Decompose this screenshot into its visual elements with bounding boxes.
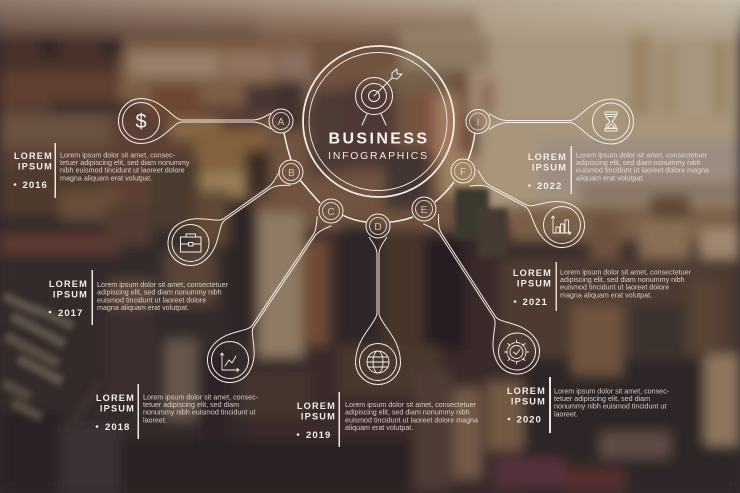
text block 2017: 2017 bbox=[58, 308, 83, 319]
text block 2018: LOREM bbox=[96, 393, 135, 403]
text block 2021: 2021 bbox=[522, 297, 548, 308]
text block 2022: IPSUM bbox=[532, 162, 567, 172]
heading: business: BUSINESS bbox=[328, 130, 430, 148]
connector C: line chart bbox=[199, 199, 343, 391]
text block 2017: LOREM bbox=[49, 279, 88, 289]
node letter C: C bbox=[327, 207, 335, 218]
icon: dollar sign: $ bbox=[135, 111, 147, 133]
text block 2016: tetuer adipiscing elit, sed diam nonummy bbox=[60, 159, 190, 167]
text block 2022: aliquam erat volutpat. bbox=[576, 174, 644, 182]
text block 2016: IPSUM bbox=[18, 162, 53, 172]
icon: target with arrow bbox=[356, 69, 402, 125]
connector F: bar chart bbox=[451, 158, 592, 255]
icon: hourglass bbox=[605, 112, 617, 131]
node letter A: A bbox=[278, 117, 285, 128]
text block 2017: magna aliquam erat volutpat. bbox=[97, 304, 189, 312]
text block 2021: magna aliquam erat volutpat. bbox=[560, 291, 652, 299]
text block 2022: LOREM bbox=[528, 152, 567, 162]
text block 2019: 2019 bbox=[306, 430, 331, 441]
icon: line chart bbox=[220, 353, 239, 372]
connector B: briefcase bbox=[159, 159, 303, 274]
text block 2016 bbox=[14, 143, 190, 198]
text block 2017: adipiscing elit, sed diam nonummy nibh bbox=[97, 289, 222, 297]
text block 2019: adipiscing elit, sed diam nonummy nibh bbox=[345, 409, 470, 417]
text block 2020: laoreet. bbox=[554, 410, 578, 418]
node letter F: F bbox=[460, 167, 466, 178]
text block 2020: LOREM bbox=[507, 386, 546, 396]
text block 2017 bbox=[49, 270, 229, 325]
text block 2020: 2020 bbox=[516, 414, 542, 426]
text block 2018: Lorem ipsum dolor sit amet, consec- bbox=[143, 394, 259, 402]
text block 2019: IPSUM bbox=[301, 412, 336, 422]
text block 2022: euismod tincidunt ut laoreet dolore magna bbox=[576, 167, 709, 175]
icon: briefcase bbox=[180, 234, 201, 252]
text block 2019: LOREM bbox=[297, 401, 336, 411]
connector I: hourglass bbox=[466, 99, 634, 144]
text block 2017: IPSUM bbox=[53, 290, 88, 300]
text block 2016: nibh euismod tincidunt ut laoreet dolore bbox=[60, 167, 185, 175]
text block 2018 bbox=[96, 384, 259, 439]
icon: gear with check bbox=[504, 340, 528, 364]
connector D: globe bbox=[356, 214, 400, 384]
text block 2021: adipiscing elit, sed diam nonummy nibh bbox=[560, 276, 685, 284]
text block 2022: 2022 bbox=[537, 181, 562, 192]
text block 2018: laoreet. bbox=[143, 416, 167, 424]
text block 2018: nonummy nibh euismod tincidunt ut bbox=[143, 409, 255, 417]
text block 2019: euismod tincidunt ut laoreet dolore magna bbox=[345, 416, 478, 424]
subheading: infographics: INFOGRAPHICS bbox=[328, 151, 429, 162]
text block 2018: IPSUM bbox=[100, 404, 135, 414]
text block 2020: tetuer adipiscing elit, sed diam bbox=[554, 395, 650, 403]
text block 2021: euismod tincidunt ut laoreet dolore bbox=[560, 284, 669, 292]
text block 2021: Lorem ipsum dolor sit amet, consectetuer bbox=[560, 268, 692, 276]
text block 2018: tetuer adipiscing elit, sed diam bbox=[143, 401, 239, 409]
node letter B: B bbox=[288, 168, 295, 179]
text block 2021: IPSUM bbox=[517, 278, 552, 288]
connector arc between nodes bbox=[284, 133, 475, 222]
text block 2020: nonummy nibh euismod tincidunt ut bbox=[554, 403, 666, 411]
connector E: gear bbox=[412, 197, 548, 383]
node letter D: D bbox=[374, 222, 382, 233]
text block 2022 bbox=[528, 146, 709, 194]
text block 2020: Lorem ipsum dolor sit amet, consec- bbox=[554, 388, 670, 396]
icon: bar chart bbox=[552, 216, 571, 234]
text block 2017: euismod tincidunt ut laoreet dolore bbox=[97, 296, 206, 304]
text block 2016: Lorem ipsum dolor sit amet, consec- bbox=[60, 152, 176, 160]
node letter E: E bbox=[421, 205, 428, 216]
text block 2017: Lorem ipsum dolor sit amet, consectetuer bbox=[97, 281, 229, 289]
central circle badge bbox=[303, 46, 454, 197]
text block 2022: Lorem ipsum dolor sit amet, consectetuer bbox=[576, 152, 708, 160]
text block 2019 bbox=[297, 392, 478, 447]
text block 2022: adipiscing elit, sed diam nonummy nibh bbox=[576, 159, 701, 167]
text block 2019: aliquam erat volutpat. bbox=[345, 424, 413, 432]
text block 2020 bbox=[507, 377, 670, 433]
node letter I: I bbox=[477, 118, 479, 128]
text block 2021 bbox=[513, 262, 692, 311]
text block 2021: LOREM bbox=[513, 268, 552, 278]
text block 2020: IPSUM bbox=[511, 396, 546, 406]
text block 2016: LOREM bbox=[14, 151, 53, 161]
text block 2016: magna aliquam erat volutpat. bbox=[60, 174, 152, 182]
text block 2018: 2018 bbox=[105, 422, 130, 433]
icon: globe bbox=[367, 351, 389, 373]
connector A: dollar bbox=[118, 98, 293, 144]
text block 2016: 2016 bbox=[22, 180, 48, 191]
text block 2019: Lorem ipsum dolor sit amet, consectetuer bbox=[345, 401, 477, 409]
